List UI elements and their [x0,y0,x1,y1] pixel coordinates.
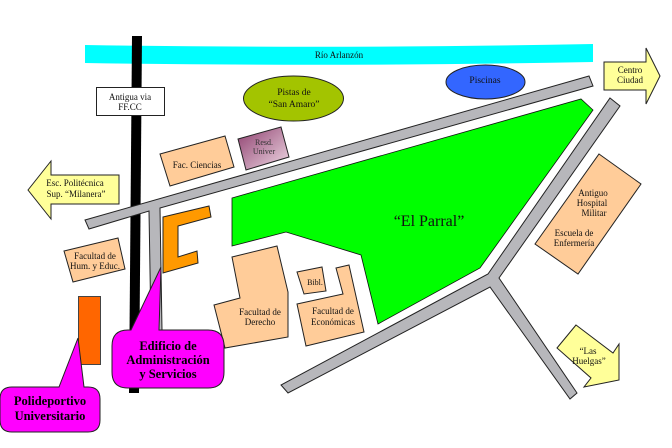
ellipse: Pistas de San Amaro: Pistas de [277,88,311,98]
building: Antiguo Hospital Militar, Escuela de Enfermería: Hospital [577,198,608,208]
building: Antiguo Hospital Militar, Escuela de Enfermería: Antiguo [578,188,608,198]
building: Resd. Univer: Univer [253,147,275,156]
arrow: Centro Ciudad: Centro [618,65,643,75]
river: Río Arlanzón [85,44,593,65]
building: Facultad de Hum. y Educ.: Hum. y Educ. [70,261,120,271]
building: Facultad de Derecho: Facultad de [239,307,281,317]
building: Facultad de Derecho: Derecho [245,317,276,327]
label: Antigua via FF.CC [96,88,164,116]
callout: Edificio de Administración y Servicios: Administración [126,353,210,367]
building: Facultad de Económicas [297,265,364,346]
building: orange administration [163,206,211,273]
arrow: Esc. Politécnica Sup. Milanera [28,161,119,219]
building: Resd. Univer [238,127,289,170]
arrow: Las Huelgas: Huelgas” [572,356,606,366]
building: Antiguo Hospital Militar, Escuela de Enfermería [535,154,641,274]
callout: Edificio de Administración y Servicios [112,267,224,388]
callout: Edificio de Administración y Servicios: y Servicios [139,367,197,381]
arrow: Esc. Politécnica Sup. Milanera: Esc. Politécnica [46,178,104,188]
building: Fac. Ciencias [160,136,234,186]
arrow: Centro Ciudad [604,48,660,104]
building: Bibl. [297,267,326,294]
callout: Polideportivo Universitario [0,338,100,432]
ellipse: Piscinas: Piscinas [469,76,501,86]
label: Antigua via FF.CC: Antigua via [109,92,151,102]
building: Fac. Ciencias: Fac. Ciencias [173,160,222,170]
building: Resd. Univer: Resd. [255,138,273,147]
road: south junction [281,98,620,399]
ellipse: Piscinas [446,65,525,99]
building: Facultad de Hum. y Educ. [64,238,125,282]
building: Antiguo Hospital Militar, Escuela de Enfermería: Enfermería [554,238,594,248]
callout: Polideportivo Universitario: Universitario [15,409,85,423]
river: Río Arlanzón: Río Arlanzón [315,50,364,60]
ellipse: Pistas de San Amaro: “San Amaro” [269,100,319,110]
arrow: Centro Ciudad: Ciudad [617,75,643,85]
railway line [129,36,142,393]
building: Facultad de Derecho [214,246,288,348]
arrow: Las Huelgas [557,325,619,387]
building: Antiguo Hospital Militar, Escuela de Enfermería: Escuela de [555,228,593,238]
building: Facultad de Económicas: Facultad de [312,306,354,316]
callout: Polideportivo Universitario: Polideportivo [14,394,86,408]
building: Facultad de Hum. y Educ.: Facultad de [74,251,116,261]
callout: Edificio de Administración y Servicios: Edificio de [139,339,197,353]
building: Polideportivo [78,296,100,364]
arrow: Las Huelgas: “Las [580,346,597,356]
ellipse: Pistas de San Amaro [244,76,344,121]
road: north road with branch [85,76,593,330]
building: Bibl.: Bibl. [307,278,323,287]
building: Facultad de Económicas: Económicas [311,317,355,327]
green area: El Parral [232,99,593,324]
green area: El Parral: “El Parral” [394,213,464,230]
building: Antiguo Hospital Militar, Escuela de Enfermería: Militar [582,208,606,218]
label: Antigua via FF.CC: FF.CC [118,102,142,112]
arrow: Esc. Politécnica Sup. Milanera: Sup. “Milanera” [47,189,105,199]
